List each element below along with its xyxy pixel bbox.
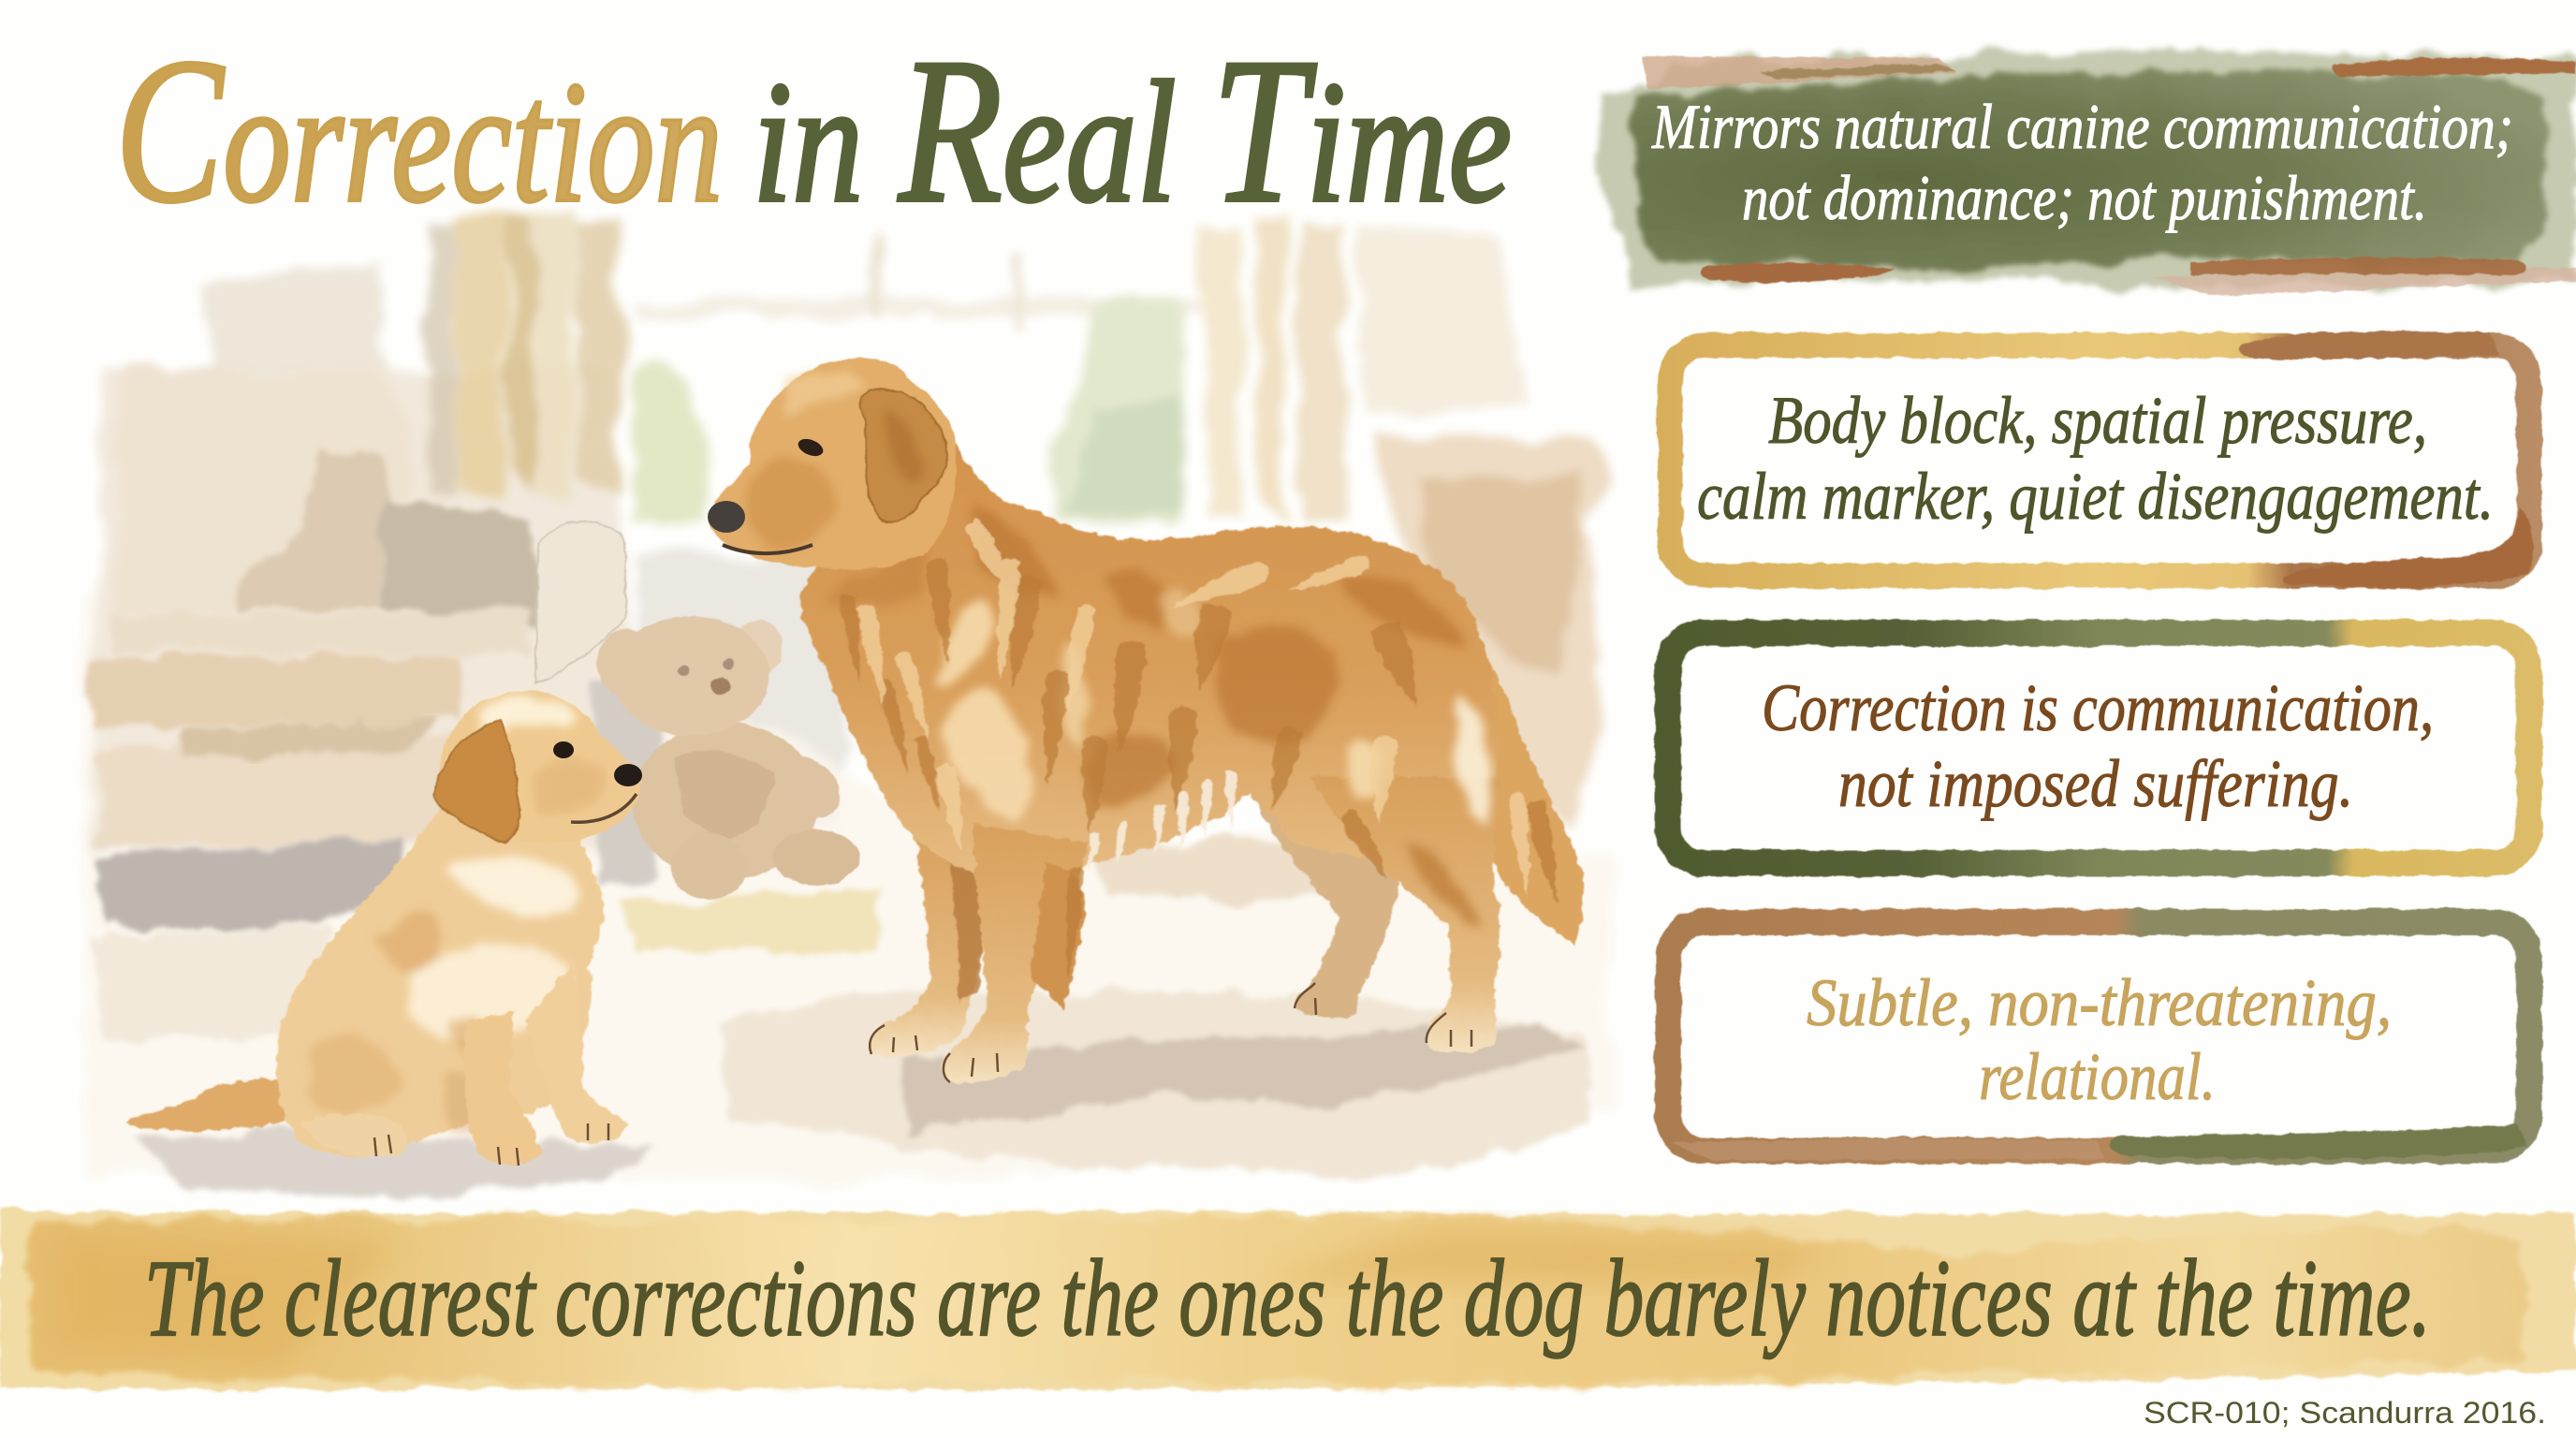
puppy tail xyxy=(124,1077,290,1131)
title: Correction xyxy=(115,16,723,246)
puppy front legs xyxy=(464,1011,541,1164)
adult torso and mane xyxy=(799,412,1498,880)
panel: subtle non-threatening: relational. xyxy=(1979,1039,2216,1114)
panel: mirrors natural communication xyxy=(1599,51,2576,296)
bottom banner xyxy=(0,1210,2576,1389)
puppy xyxy=(124,691,642,1166)
puppy mouth xyxy=(571,794,637,822)
puppy body xyxy=(276,805,605,1156)
olive and gold frame xyxy=(1668,633,2529,863)
panel wash xyxy=(1599,51,2576,288)
puppy eye xyxy=(553,741,574,758)
banner light wash xyxy=(0,1210,2576,1389)
puppy hind foot xyxy=(300,1114,407,1157)
adult fur feathers xyxy=(839,517,1566,980)
sofa xyxy=(94,370,625,847)
adult near front leg xyxy=(944,824,1086,1083)
panel: correction is communication xyxy=(1668,633,2529,863)
adult dark coat patches xyxy=(824,506,1484,927)
panel: correction is communication: not imposed suffering. xyxy=(1838,746,2353,821)
adult eye xyxy=(796,435,826,460)
teddy bear xyxy=(597,616,859,900)
adult ear xyxy=(861,389,947,522)
sofa arm xyxy=(535,521,625,683)
teddy nose xyxy=(710,679,731,694)
darker accents xyxy=(1671,1123,2527,1161)
adult head xyxy=(709,358,957,569)
floor shadows and washes xyxy=(94,669,1591,1198)
panel text: Subtle, non-threatening, xyxy=(1807,965,2392,1040)
puppy ear xyxy=(433,721,520,843)
dark brown accents xyxy=(2238,331,2534,587)
banner main wash xyxy=(30,1217,2527,1383)
sofa shaded cushion xyxy=(229,448,389,609)
puppy nose xyxy=(614,764,642,786)
adult leg feathering xyxy=(1030,861,1086,1011)
gold and brown frame xyxy=(1670,345,2529,576)
brown accents top xyxy=(1643,56,1956,89)
citation: SCR-010; Scandurra 2016. xyxy=(2144,1396,2546,1430)
puppy coat patches xyxy=(309,855,580,1133)
adult mouth xyxy=(723,545,812,553)
background: room wall washes xyxy=(84,225,1610,1180)
brown accent strokes xyxy=(1699,58,2576,283)
adult near hind leg xyxy=(1310,777,1500,1052)
adult golden retriever xyxy=(708,358,1584,1083)
illustration: puppy and adult golden retriever in a living room xyxy=(84,212,1612,1198)
adult light coat patches xyxy=(936,592,1490,824)
puppy paws xyxy=(374,1123,608,1166)
adult tail xyxy=(1480,655,1584,946)
panel: body block xyxy=(1670,331,2534,587)
panel text: Body block, spatial pressure, xyxy=(1768,383,2427,458)
title: in Real Time xyxy=(753,16,1512,246)
teddy eyes xyxy=(679,666,690,677)
adult muzzle shading xyxy=(745,458,835,549)
panel: mirrors natural communication: not dominance; not punishment. xyxy=(1742,162,2427,233)
panel dark green fill xyxy=(1633,71,2546,270)
title xyxy=(115,16,1512,246)
sofa back xyxy=(115,370,412,618)
adult far hind leg xyxy=(1254,796,1401,1018)
sofa seat blocks xyxy=(112,609,529,655)
adult nose xyxy=(708,501,745,533)
puppy head xyxy=(439,691,641,844)
brown and olive frame xyxy=(1668,922,2529,1151)
panel: subtle non-threatening xyxy=(1668,922,2529,1161)
side table xyxy=(1374,436,1612,824)
panel text: Correction is communication, xyxy=(1762,670,2434,745)
window foliage xyxy=(633,296,1183,522)
curtains xyxy=(427,212,1343,528)
adult paws xyxy=(870,983,1471,1082)
adult far front leg xyxy=(870,824,997,1056)
banner darker blooms xyxy=(56,1236,402,1367)
